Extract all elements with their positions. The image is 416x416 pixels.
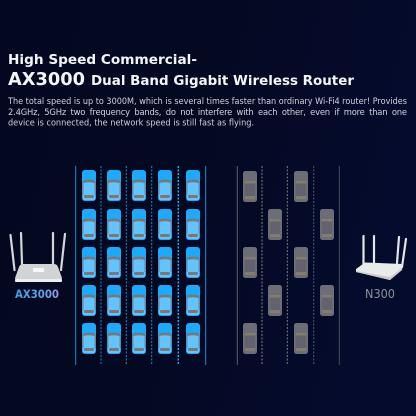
description text: 2.4GHz, 5GHz two frequency bands, do not interfere with each other, even if more than one: [8, 107, 407, 117]
title line 2: [8, 70, 354, 90]
label: N300: N300: [365, 287, 395, 301]
blue lane lines: AX3000 road: [76, 166, 206, 365]
description text: The total speed is up to 3000M, which is several times faster than ordinary Wi-Fi4 router! Provides: [7, 96, 407, 106]
title line 2: Dual Band Gigabit Wireless Router: [91, 73, 354, 89]
gray lane lines: N300 road: [237, 166, 339, 365]
description text: [7, 96, 407, 128]
description text: device is connected, the network speed is still fast as flying.: [8, 118, 254, 128]
blue cars: 5 lanes by 5 rows: [82, 170, 200, 354]
title line 2: AX3000: [8, 70, 85, 90]
icon: AX3000 router: [10, 233, 65, 282]
title line 1: High Speed Commercial-: [8, 52, 197, 68]
icon: N300 router: [356, 236, 406, 280]
label: AX3000: AX3000: [15, 287, 59, 301]
gray cars: sparse traffic: [243, 171, 334, 354]
